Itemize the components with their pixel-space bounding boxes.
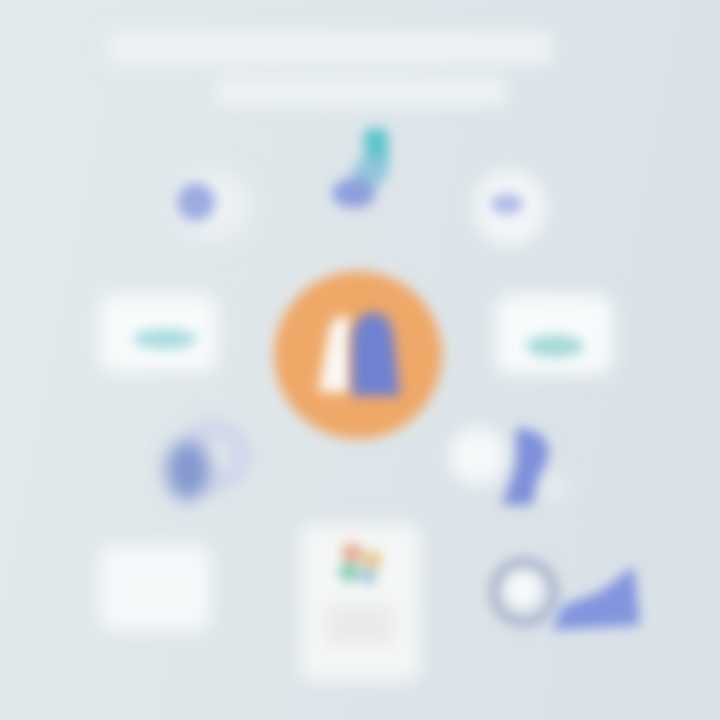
- icon: ring and mountain: [494, 562, 640, 630]
- panel: left card: [100, 295, 216, 371]
- panel: bottom centre card: [301, 525, 420, 680]
- title: [108, 32, 553, 106]
- icon: blue figure: [352, 312, 400, 396]
- icon: lower left ring: [166, 428, 242, 500]
- icon: lower right figure: [450, 428, 569, 505]
- icon: white figure: [318, 316, 350, 392]
- icon: colourful circle: [339, 543, 382, 585]
- panel: bottom left card: [100, 546, 210, 630]
- central badge: [274, 271, 442, 439]
- chart lines: [325, 605, 395, 645]
- icon: upper left circle: [174, 171, 250, 239]
- icon: upper right circle: [474, 170, 546, 246]
- panel: right card: [496, 295, 612, 374]
- icon: top centre figure: [332, 128, 388, 208]
